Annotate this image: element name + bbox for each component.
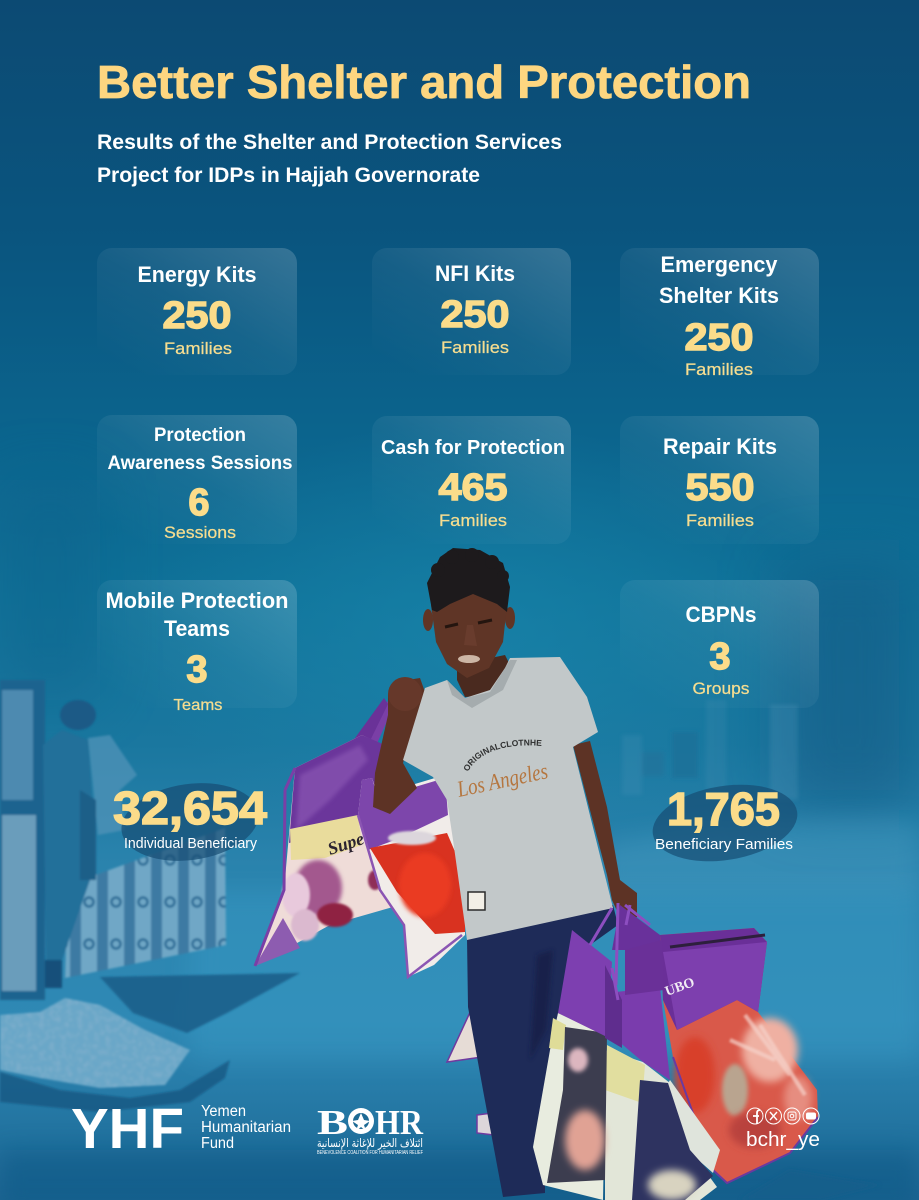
stat: individual beneficiaries: 32,654: [113, 782, 267, 834]
panel: energy kits: Families: [164, 339, 232, 358]
panel: energy kits: [97, 248, 297, 375]
stat: individual beneficiaries: [113, 775, 267, 869]
left bag of the pair: [533, 1013, 606, 1200]
stat: individual beneficiaries: Individual Beneficiary: [124, 836, 258, 852]
social icons and handle: [746, 1108, 820, 1151]
ground right and centre: [190, 890, 919, 1060]
left arm: [373, 678, 425, 814]
YHF logo: YHF: [71, 1097, 184, 1161]
panel: NFI kits: NFI Kits: [435, 261, 515, 286]
panel: CBPNs: CBPNs: [686, 602, 756, 627]
panel: mobile protection teams: [97, 580, 297, 714]
panel: NFI kits: [372, 248, 571, 375]
panel: emergency shelter kits: Shelter Kits: [659, 283, 779, 308]
panel: NFI kits: Families: [441, 338, 509, 357]
stat: beneficiary families: [647, 775, 803, 871]
panel: emergency shelter kits: [620, 248, 819, 379]
YHF logo: Fund: [201, 1135, 234, 1152]
panel: CBPNs: Groups: [692, 679, 750, 698]
stat: beneficiary families: Beneficiary Families: [655, 836, 793, 853]
panel: cash for protection: Cash for Protection: [381, 437, 565, 459]
panel: cash for protection: Families: [439, 511, 507, 530]
panel: CBPNs: [620, 580, 819, 708]
panel: protection awareness sessions: 6: [188, 482, 210, 524]
BCHR logo: HR: [375, 1103, 424, 1142]
YHF logo: Yemen: [201, 1103, 246, 1120]
subtitle: [97, 130, 562, 187]
panel: repair kits: [620, 416, 819, 544]
panel: energy kits: 250: [162, 295, 232, 337]
face: [423, 548, 515, 678]
panel: protection awareness sessions: Awareness Sessions: [108, 453, 292, 474]
subtitle: Results of the Shelter and Protection Services: [97, 130, 562, 154]
BCHR logo: B: [317, 1103, 348, 1142]
left bag: flowered: [255, 698, 400, 966]
pale bag corners behind legs: [447, 1008, 482, 1062]
shirt print: ORIGINALCLOTNHE: [464, 740, 542, 771]
shirt print: [454, 740, 550, 802]
panel: repair kits: Families: [686, 511, 754, 530]
panel: repair kits: 550: [686, 467, 754, 509]
panel: NFI kits: 250: [440, 294, 510, 336]
big red bag: [660, 928, 818, 1183]
title: Better Shelter and Protection: [97, 56, 751, 108]
panel: energy kits: Energy Kits: [138, 262, 256, 287]
panel: cash for protection: [372, 416, 571, 544]
panel: mobile protection teams: Teams: [164, 616, 230, 641]
shirt print: Los Angeles: [454, 758, 550, 802]
panel: mobile protection teams: Mobile Protection: [106, 588, 288, 613]
panel: cash for protection: 465: [438, 467, 508, 509]
panel: emergency shelter kits: Families: [685, 360, 753, 379]
panel: emergency shelter kits: Emergency: [660, 252, 778, 277]
panel: emergency shelter kits: 250: [684, 317, 754, 359]
bag handles: [590, 903, 650, 1000]
panel: mobile protection teams: 3: [186, 649, 208, 691]
BCHR logo: [317, 1103, 424, 1156]
YHF logo: [71, 1097, 291, 1161]
social icons and handle: bchr_ye: [746, 1129, 820, 1151]
panel: repair kits: Repair Kits: [663, 434, 777, 459]
middle bag: [605, 1050, 717, 1200]
panel: protection awareness sessions: [97, 415, 297, 544]
subtitle: Project for IDPs in Hajjah Governorate: [97, 163, 480, 187]
BCHR logo: ائتلاف الخير للإغاثة الإنسانية: [317, 1136, 423, 1151]
stat: beneficiary families: 1,765: [667, 783, 780, 835]
photo: boy carrying bags: [254, 548, 818, 1200]
neck: [457, 655, 510, 697]
bag brand: Super: [325, 826, 374, 859]
distant buildings right: [622, 700, 798, 800]
right bags: UBO: [663, 975, 697, 1000]
right bags: [533, 903, 818, 1200]
background: blurred person and mattress at left: [0, 680, 230, 1112]
panel: protection awareness sessions: Sessions: [164, 523, 236, 542]
right arm: [573, 741, 637, 924]
panel: protection awareness sessions: Protection: [154, 425, 246, 446]
BCHR logo: BENEVOLENCE COALITION FOR HUMANITARIAN RELIEF: [317, 1150, 423, 1156]
rubble pile: [0, 998, 190, 1088]
YHF logo: Humanitarian: [201, 1119, 291, 1136]
t-shirt: [403, 657, 613, 940]
panel: CBPNs: 3: [709, 636, 731, 678]
trousers: [467, 905, 618, 1197]
panel: mobile protection teams: Teams: [174, 697, 222, 714]
middle bag: red: [358, 775, 465, 977]
